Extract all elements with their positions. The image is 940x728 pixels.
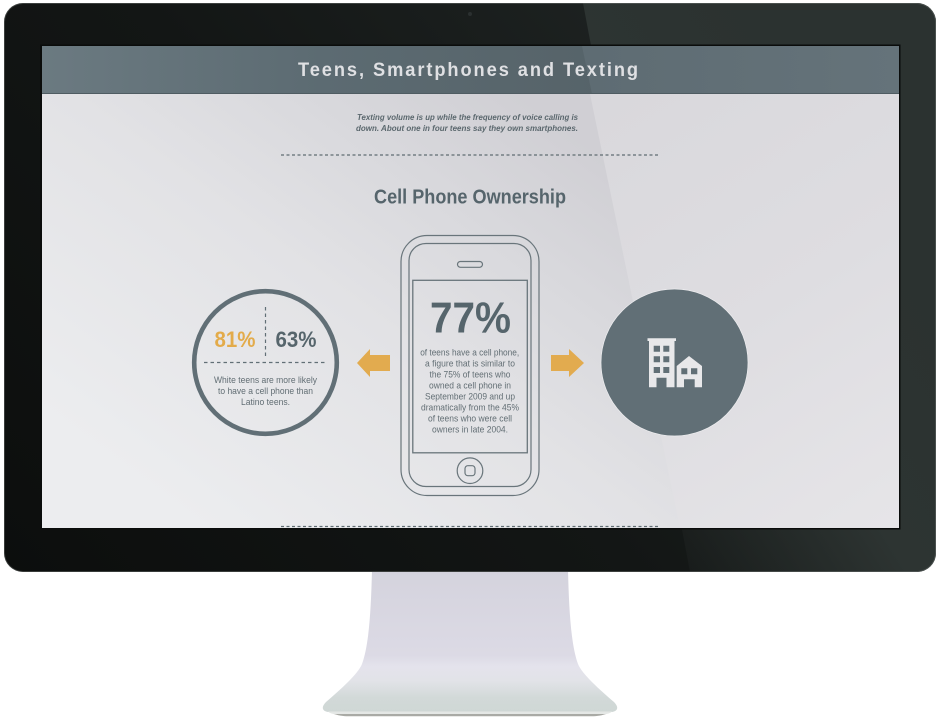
phone body copy: owners in late 2004. bbox=[432, 424, 508, 434]
big number 77%: 77% bbox=[430, 294, 511, 342]
intro text: down. About one in four teens say they own smartphones. bbox=[356, 123, 578, 133]
stat: 81%: 81% bbox=[214, 327, 256, 352]
title: Teens, Smartphones and Texting bbox=[298, 60, 640, 81]
phone illustration bbox=[401, 236, 539, 496]
intro text bbox=[356, 112, 578, 133]
top divider bbox=[281, 154, 659, 156]
comparison caption: White teens are more likely bbox=[214, 375, 317, 385]
panel: ethnicity comparison circle bbox=[194, 291, 337, 434]
section heading: Cell Phone Ownership bbox=[374, 186, 566, 208]
phone body copy: September 2009 and up bbox=[425, 392, 515, 402]
phone body copy: dramatically from the 45% bbox=[421, 402, 519, 412]
phone body copy: of teens who were cell bbox=[428, 414, 512, 424]
phone body copy bbox=[420, 348, 519, 434]
intro text: Texting volume is up while the frequency of voice calling is bbox=[357, 112, 578, 122]
comparison caption: to have a cell phone than bbox=[218, 386, 313, 396]
phone body copy: the 75% of teens who bbox=[430, 370, 510, 380]
monitor stand bbox=[323, 570, 617, 716]
screen bbox=[40, 44, 900, 530]
phone screen stat bbox=[420, 294, 519, 434]
phone body copy: of teens have a cell phone, bbox=[420, 348, 519, 358]
phone body copy: owned a cell phone in bbox=[429, 380, 511, 390]
stat: 63%: 63% bbox=[276, 327, 316, 352]
phone body copy: a figure that is similar to bbox=[425, 358, 515, 368]
arrow: left bbox=[357, 349, 390, 377]
title banner bbox=[42, 46, 899, 94]
comparison caption: Latino teens. bbox=[241, 397, 290, 407]
icon: buildings bbox=[648, 338, 702, 387]
bottom divider bbox=[281, 526, 659, 528]
panel: urban circle bbox=[601, 289, 748, 436]
arrow: right bbox=[551, 349, 584, 377]
comparison caption bbox=[214, 375, 317, 407]
monitor bezel bbox=[4, 3, 936, 572]
